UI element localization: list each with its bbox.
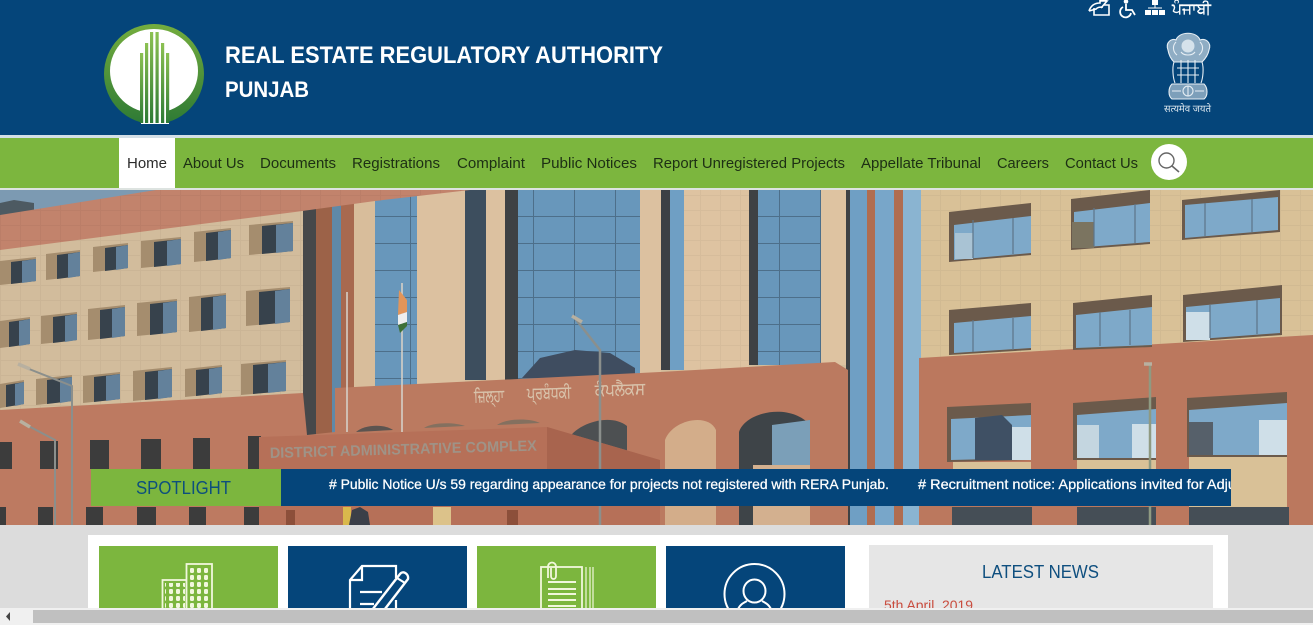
strip below nav — [0, 188, 1313, 190]
navigation bar: Documents — [260, 155, 336, 172]
panel: latest news — [869, 545, 1213, 615]
navigation bar: Appellate Tribunal — [861, 155, 981, 172]
icon: accessibility — [1120, 0, 1135, 17]
building lettering: ਜ਼ਿਲ੍ਹਾ — [473, 386, 505, 408]
tile: notices — [477, 546, 656, 617]
building lettering: ਕੰਪਲੈਕਸ — [594, 379, 646, 400]
entrance details — [286, 507, 518, 525]
ticker text: # Public Notice U/s 59 regarding appearance for projects not registered with RERA Punjab. — [329, 476, 889, 492]
icon: document and pencil — [350, 566, 408, 618]
spotlight label: SPOTLIGHT — [136, 478, 231, 498]
vertical central columns — [303, 190, 921, 525]
icon: share — [1089, 0, 1109, 15]
spotlight ticker — [91, 469, 1286, 506]
centre pink block — [307, 362, 848, 525]
site title: PUNJAB — [225, 77, 309, 102]
strip above nav — [0, 135, 1313, 138]
icon: buildings — [162, 564, 212, 616]
site title: REAL ESTATE REGULATORY AUTHORITY — [225, 42, 663, 69]
right wing — [919, 190, 1313, 525]
navigation bar: Careers — [997, 155, 1049, 172]
logo — [104, 24, 204, 124]
icon: search — [1151, 144, 1187, 180]
building lettering — [473, 379, 646, 408]
news heading: LATEST NEWS — [982, 562, 1099, 582]
navigation bar: Public Notices — [541, 155, 637, 172]
icon: user — [724, 564, 784, 624]
navigation bar: Home — [127, 155, 167, 172]
entrance canopy — [259, 427, 660, 525]
entrance canopy: DISTRICT ADMINISTRATIVE COMPLEX — [270, 438, 537, 462]
navigation bar: Complaint — [457, 155, 526, 172]
icon: clipped papers — [541, 562, 593, 617]
site title — [225, 42, 663, 102]
navigation bar: Contact Us — [1065, 155, 1138, 172]
navigation bar: Report Unregistered Projects — [653, 155, 845, 172]
navigation bar — [0, 138, 1313, 188]
ticker text — [328, 478, 1231, 492]
navigation bar: Registrations — [352, 155, 440, 172]
street lamps — [18, 316, 1152, 525]
flag and poles — [347, 283, 407, 432]
horizontal scrollbar — [0, 608, 1313, 625]
tile: login — [666, 546, 845, 624]
left wing cream wall — [0, 210, 303, 410]
icon: state emblem — [1164, 33, 1211, 115]
header bar — [0, 0, 1313, 135]
top pink band — [0, 190, 470, 250]
news date: 5th April, 2019 — [884, 597, 973, 613]
hero photo: district administrative complex — [0, 190, 1313, 525]
icon: state emblem: सत्यमेव जयते — [1164, 103, 1211, 115]
icon: scroll arrow — [6, 612, 10, 621]
arches — [356, 412, 810, 525]
icon: sitemap — [1145, 0, 1165, 15]
tile: registration — [288, 546, 467, 618]
language link: ਪੰਜਾਬੀ — [1171, 0, 1212, 18]
building lettering: ਪ੍ਰਬੰਧਕੀ — [526, 383, 572, 405]
tile: projects — [99, 546, 278, 616]
content panel — [88, 535, 1228, 625]
left wing pink base — [0, 393, 307, 525]
left wing windows — [0, 221, 293, 408]
navigation bar: About Us — [183, 155, 244, 172]
sky — [0, 190, 160, 216]
ticker text: # Recruitment notice: Applications invited for Adjudicating — [918, 476, 1286, 492]
